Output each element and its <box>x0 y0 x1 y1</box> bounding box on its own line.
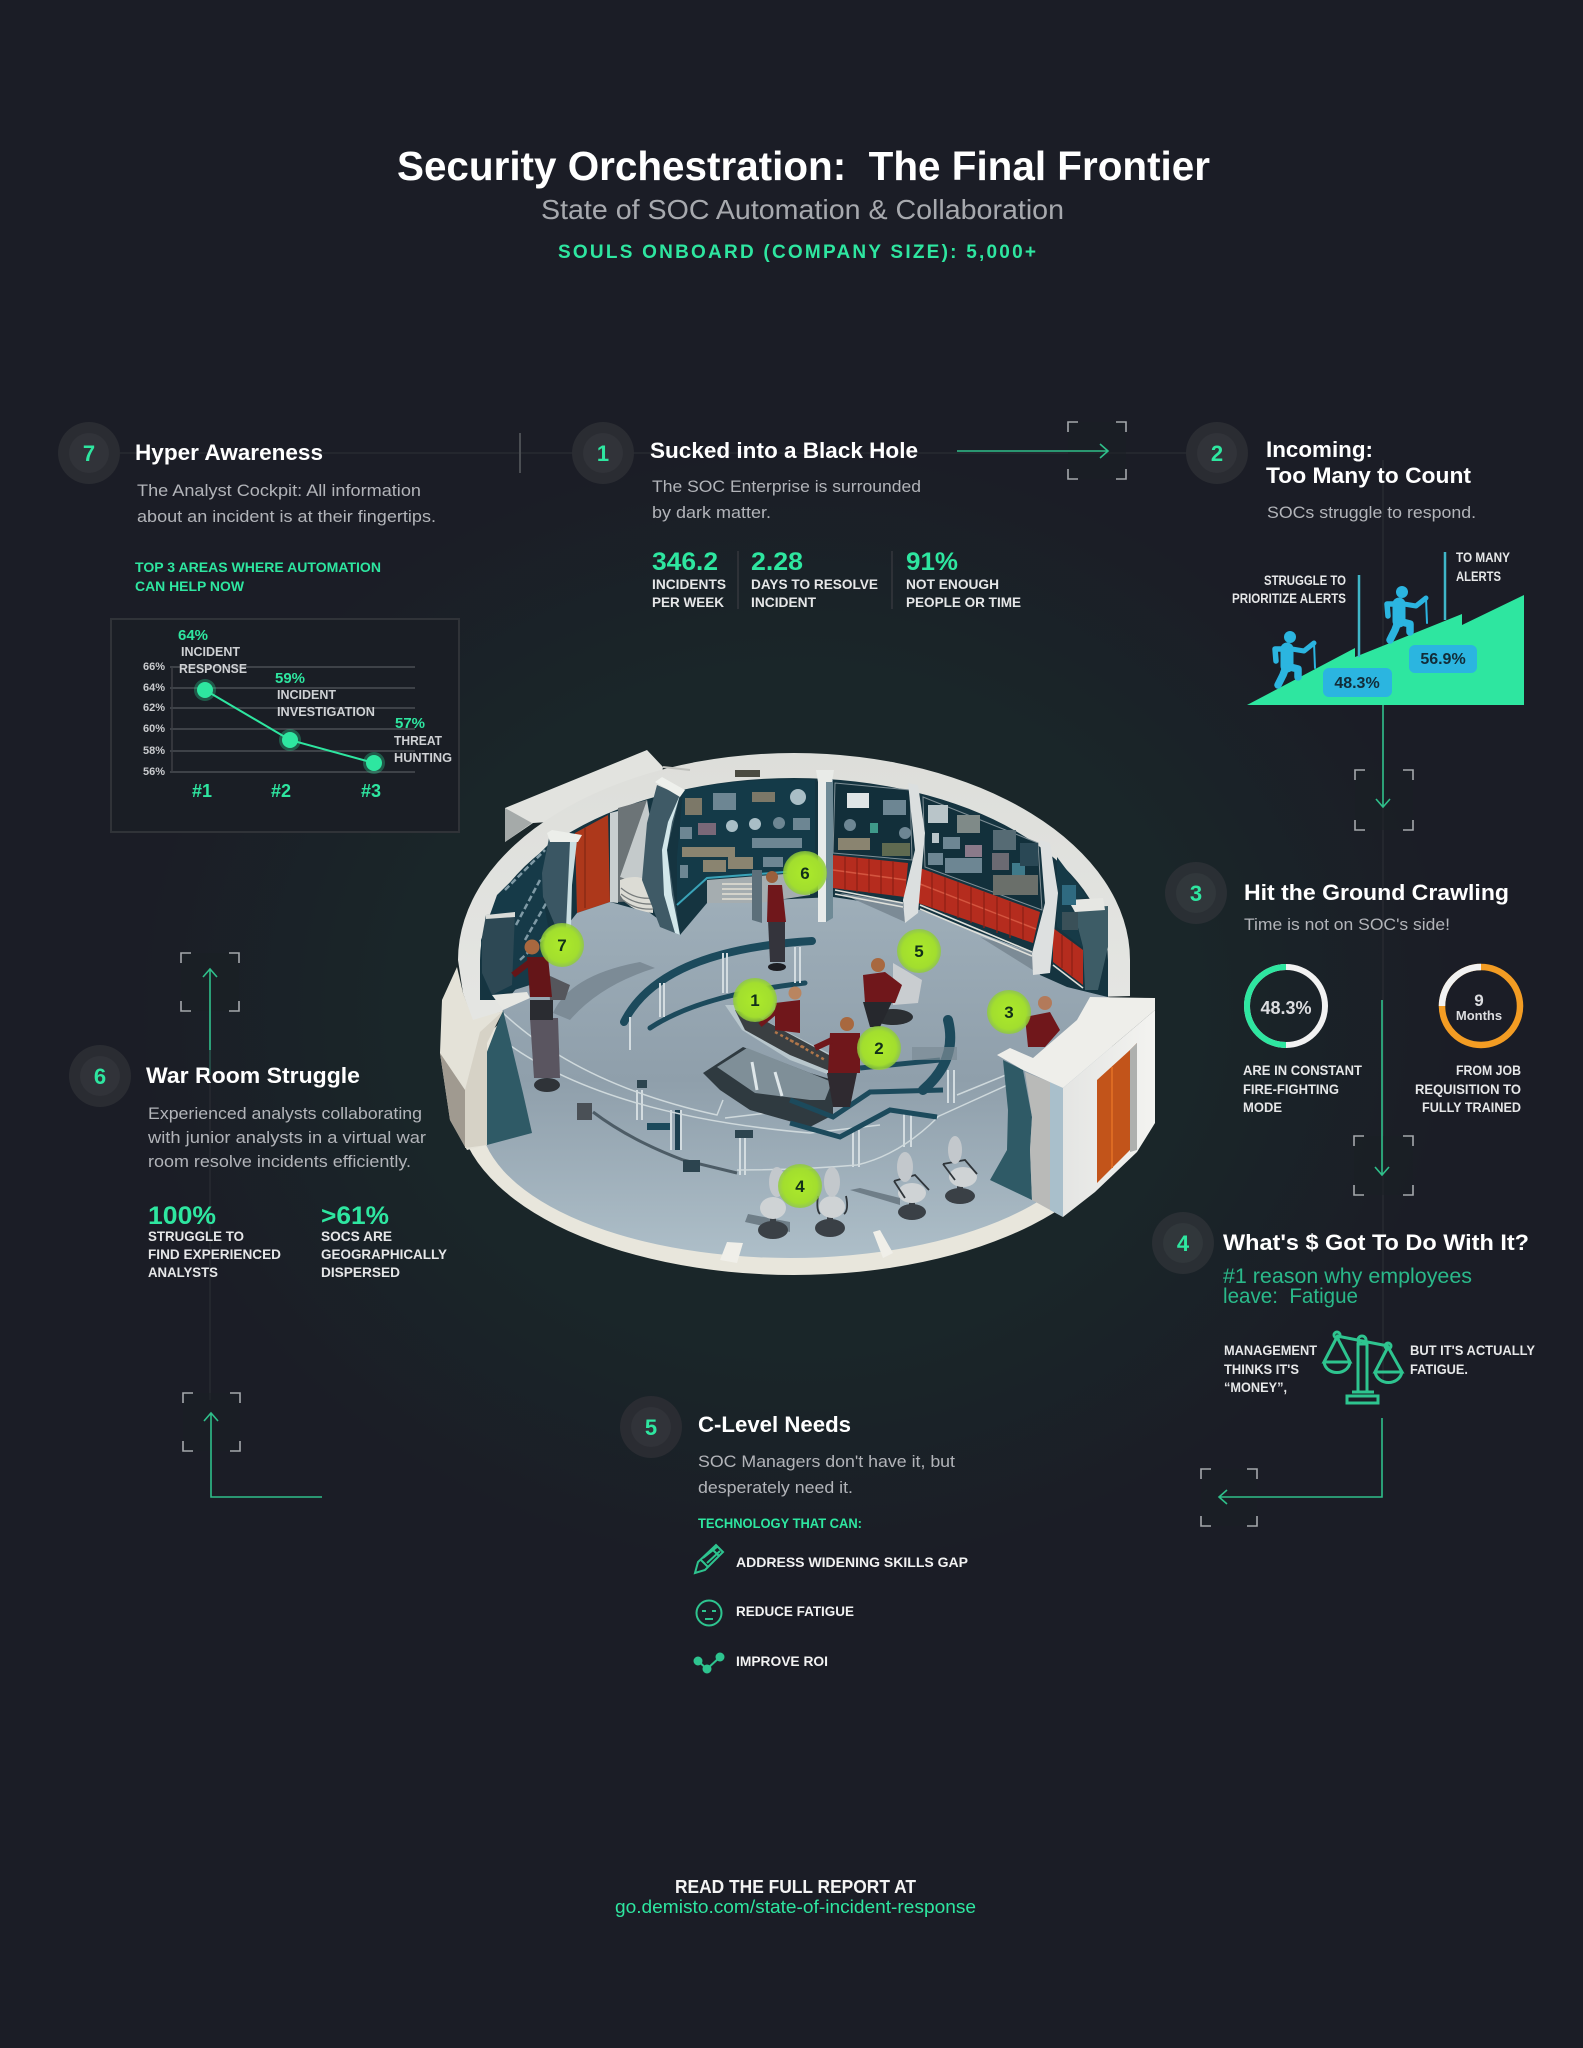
line chart: INVESTIGATION <box>277 705 375 719</box>
description 1 <box>652 477 921 522</box>
panel: 5 c-level needs <box>620 1396 968 1672</box>
donut caption right: REQUISITION TO <box>1415 1082 1521 1097</box>
stat: days: DAYS TO RESOLVE <box>751 577 878 592</box>
stat: incidents: INCIDENTS <box>652 577 726 592</box>
stat: 100%: ANALYSTS <box>148 1265 218 1280</box>
line chart: 57% <box>395 715 425 732</box>
management text: THINKS IT'S <box>1224 1362 1299 1377</box>
alcove <box>618 800 660 913</box>
line chart: #1 <box>192 781 212 801</box>
list item: fatigue <box>696 1600 854 1626</box>
stat: incidents <box>652 548 726 610</box>
heading 7: Hyper Awareness <box>135 440 323 465</box>
list item: skills gap <box>695 1545 968 1573</box>
automation subheading: CAN HELP NOW <box>135 579 244 594</box>
number markers: 5 <box>914 942 924 961</box>
panel: 1 black hole <box>572 422 1021 610</box>
automation subheading: TOP 3 AREAS WHERE AUTOMATION <box>135 560 381 575</box>
description 7 <box>137 481 436 526</box>
icon: network nodes <box>694 1654 724 1672</box>
stat: 100% <box>148 1202 281 1280</box>
pillars <box>642 770 1058 975</box>
stat: days: INCIDENT <box>751 595 817 610</box>
donut caption right <box>1415 1063 1521 1115</box>
badge 7: 7 <box>83 441 95 466</box>
mountain chart: 48.3% <box>1334 675 1380 692</box>
isometric bridge illustration <box>440 750 1155 1275</box>
actually fatigue text: FATIGUE. <box>1410 1362 1468 1377</box>
heading 5: C-Level Needs <box>698 1412 851 1437</box>
crew member 6 <box>766 871 786 971</box>
arrow 1 to 2 <box>957 422 1126 479</box>
list item: fatigue: REDUCE FATIGUE <box>736 1604 854 1619</box>
donut: 9 months: 9 <box>1474 991 1484 1010</box>
subtitle: State of SOC Automation & Collaboration <box>541 194 1064 225</box>
donut caption right: FULLY TRAINED <box>1422 1100 1521 1115</box>
line chart: THREAT <box>394 734 442 748</box>
heading 2: Too Many to Count <box>1266 463 1472 488</box>
description 6: Experienced analysts collaborating <box>148 1104 422 1123</box>
stat: people <box>906 548 1021 610</box>
line chart: INCIDENT <box>181 645 240 659</box>
red door <box>575 811 618 913</box>
mountain chart: ALERTS <box>1456 569 1501 584</box>
number markers <box>540 851 1031 1208</box>
stat: days <box>751 548 878 610</box>
stat: people: NOT ENOUGH <box>906 577 999 592</box>
line chart: RESPONSE <box>179 662 247 676</box>
number markers: 3 <box>1004 1003 1014 1022</box>
stat: 100%: STRUGGLE TO <box>148 1229 244 1244</box>
technology subheading: TECHNOLOGY THAT CAN: <box>698 1516 862 1531</box>
donut caption left: MODE <box>1243 1100 1282 1115</box>
badge 4: 4 <box>1177 1231 1190 1256</box>
heading 2: Incoming: <box>1266 437 1373 462</box>
arrow 5 to 6 <box>183 1393 322 1497</box>
arrow 3 to 4 <box>1354 1000 1413 1195</box>
badge 4 <box>1152 1212 1214 1274</box>
description 6: with junior analysts in a virtual war <box>147 1128 426 1147</box>
line chart <box>111 619 459 832</box>
title block <box>397 143 1210 263</box>
stat: 100%: FIND EXPERIENCED <box>148 1247 281 1262</box>
list item: roi: IMPROVE ROI <box>736 1654 828 1669</box>
heading 2 <box>1266 437 1472 488</box>
donut caption left: FIRE-FIGHTING <box>1243 1082 1339 1097</box>
left console bay <box>481 830 582 1010</box>
description 3: Time is not on SOC's side! <box>1244 915 1450 934</box>
footer call to action: READ THE FULL REPORT AT <box>675 1877 916 1897</box>
crew <box>513 871 1060 1239</box>
number markers: 4 <box>795 1177 805 1196</box>
badge 3 <box>1165 862 1227 924</box>
heading 6: War Room Struggle <box>146 1063 360 1088</box>
panel: 4 money <box>1152 1212 1535 1403</box>
icon: scales <box>1324 1332 1402 1403</box>
management text <box>1224 1343 1318 1395</box>
badge 7 <box>58 422 120 484</box>
green statement: #1 reason why employees <box>1223 1265 1472 1288</box>
actually fatigue text: BUT IT'S ACTUALLY <box>1410 1343 1535 1358</box>
front wall blocks <box>440 967 1155 1263</box>
stat: 61%: GEOGRAPHICALLY <box>321 1247 447 1262</box>
badge 1 <box>572 422 634 484</box>
description 1: by dark matter. <box>652 503 771 522</box>
donut: 9 months: Months <box>1456 1008 1502 1023</box>
donut: 9 months <box>1442 967 1520 1045</box>
arrow 4 to 5 <box>1201 1418 1382 1526</box>
company size: SOULS ONBOARD (COMPANY SIZE): 5,000+ <box>558 242 1036 263</box>
stat: people: 91% <box>906 548 958 576</box>
floor <box>480 870 1120 1258</box>
donut caption right: FROM JOB <box>1456 1063 1521 1078</box>
panel: 6 war room <box>69 1045 447 1280</box>
line chart: 66% <box>143 661 165 673</box>
heading 1: Sucked into a Black Hole <box>650 438 918 463</box>
line chart: 64% <box>143 682 165 694</box>
console rails <box>500 941 1023 1175</box>
list item: skills gap: ADDRESS WIDENING SKILLS GAP <box>736 1555 968 1570</box>
arrow 2 to 3 <box>1355 705 1413 830</box>
arrow 6 to 7 <box>181 953 239 1075</box>
heading 4: What's $ Got To Do With It? <box>1223 1230 1529 1255</box>
crew member 3 <box>1025 996 1060 1047</box>
panel: 3 hit the ground <box>1165 862 1521 1115</box>
footer call to action <box>615 1877 976 1917</box>
stat: incidents: 346.2 <box>652 548 718 576</box>
description 5 <box>698 1452 955 1497</box>
donut caption left: ARE IN CONSTANT <box>1243 1063 1363 1078</box>
icon: tired face <box>696 1600 722 1626</box>
line chart: 60% <box>143 723 165 735</box>
command console <box>703 1005 957 1137</box>
line chart: 58% <box>143 745 165 757</box>
description 5: desperately need it. <box>698 1478 853 1497</box>
badge 6: 6 <box>94 1064 106 1089</box>
mountain chart <box>1232 550 1524 705</box>
badge 2 <box>1186 422 1248 484</box>
divider between 7 and 1 <box>519 433 521 473</box>
room shell <box>458 750 1130 1275</box>
donut: 48.3%: 48.3% <box>1260 998 1312 1018</box>
line chart: 64% <box>178 627 208 644</box>
footer call to action: go.demisto.com/state-of-incident-response <box>615 1897 976 1917</box>
chairs <box>745 1136 977 1239</box>
icon: pencil <box>695 1545 723 1573</box>
description 2: SOCs struggle to respond. <box>1267 503 1476 522</box>
stat: incidents: PER WEEK <box>652 595 724 610</box>
stat: 61%: DISPERSED <box>321 1265 400 1280</box>
description 7: The Analyst Cockpit: All information <box>137 481 421 500</box>
line chart: 56% <box>143 766 165 778</box>
green statement: leave: Fatigue <box>1223 1285 1358 1308</box>
line chart: #3 <box>361 781 381 801</box>
stat: 100%: 100% <box>148 1202 216 1230</box>
automation subheading <box>135 560 381 594</box>
crew member 1 <box>760 986 802 1033</box>
stat: 61%: >61% <box>321 1202 389 1230</box>
icon: hiker lower <box>1275 631 1315 685</box>
badge 6 <box>69 1045 131 1107</box>
management text: “MONEY”, <box>1224 1380 1287 1395</box>
number markers: 1 <box>750 991 760 1010</box>
donut: 48.3% <box>1247 967 1325 1045</box>
description 7: about an incident is at their fingertips. <box>137 507 436 526</box>
number markers: 7 <box>557 936 567 955</box>
description 5: SOC Managers don't have it, but <box>698 1452 955 1471</box>
mountain chart: 56.9% <box>1420 651 1466 668</box>
donut caption left <box>1243 1063 1363 1115</box>
stat: people: PEOPLE OR TIME <box>906 595 1021 610</box>
crew member 7 <box>513 940 570 1092</box>
description 6 <box>147 1104 426 1171</box>
line chart: 62% <box>143 702 165 714</box>
crew member 2 <box>815 1017 860 1107</box>
stat: 61% <box>321 1202 447 1280</box>
panel: 2 incoming <box>1186 422 1524 705</box>
badge 5 <box>620 1396 682 1458</box>
icon: hiker upper <box>1387 586 1427 640</box>
badge 2: 2 <box>1211 441 1223 466</box>
actually fatigue text <box>1410 1343 1535 1377</box>
mountain chart: STRUGGLE TO <box>1264 573 1346 588</box>
management text: MANAGEMENT <box>1224 1343 1318 1358</box>
list item: roi <box>694 1654 828 1672</box>
badge 5: 5 <box>645 1415 657 1440</box>
line chart: 59% <box>275 670 305 687</box>
line chart: #2 <box>271 781 291 801</box>
crew member 5 <box>863 958 922 1027</box>
description 6: room resolve incidents efficiently. <box>148 1152 411 1171</box>
title: Security Orchestration: The Final Frontier <box>397 143 1210 189</box>
stat: days: 2.28 <box>751 548 803 576</box>
back panels <box>575 779 1108 990</box>
description 1: The SOC Enterprise is surrounded <box>652 477 921 496</box>
panel: 7 hyper awareness <box>58 422 459 832</box>
mountain chart: PRIORITIZE ALERTS <box>1232 591 1346 606</box>
number markers: 6 <box>800 864 810 883</box>
green statement <box>1223 1265 1472 1308</box>
badge 1: 1 <box>597 441 609 466</box>
line chart: INCIDENT <box>277 688 336 702</box>
badge 3: 3 <box>1190 881 1202 906</box>
mountain chart: TO MANY <box>1456 550 1510 565</box>
line chart: HUNTING <box>394 751 452 765</box>
number markers: 2 <box>874 1039 884 1058</box>
stat: 61%: SOCS ARE <box>321 1229 392 1244</box>
heading 3: Hit the Ground Crawling <box>1244 880 1509 905</box>
